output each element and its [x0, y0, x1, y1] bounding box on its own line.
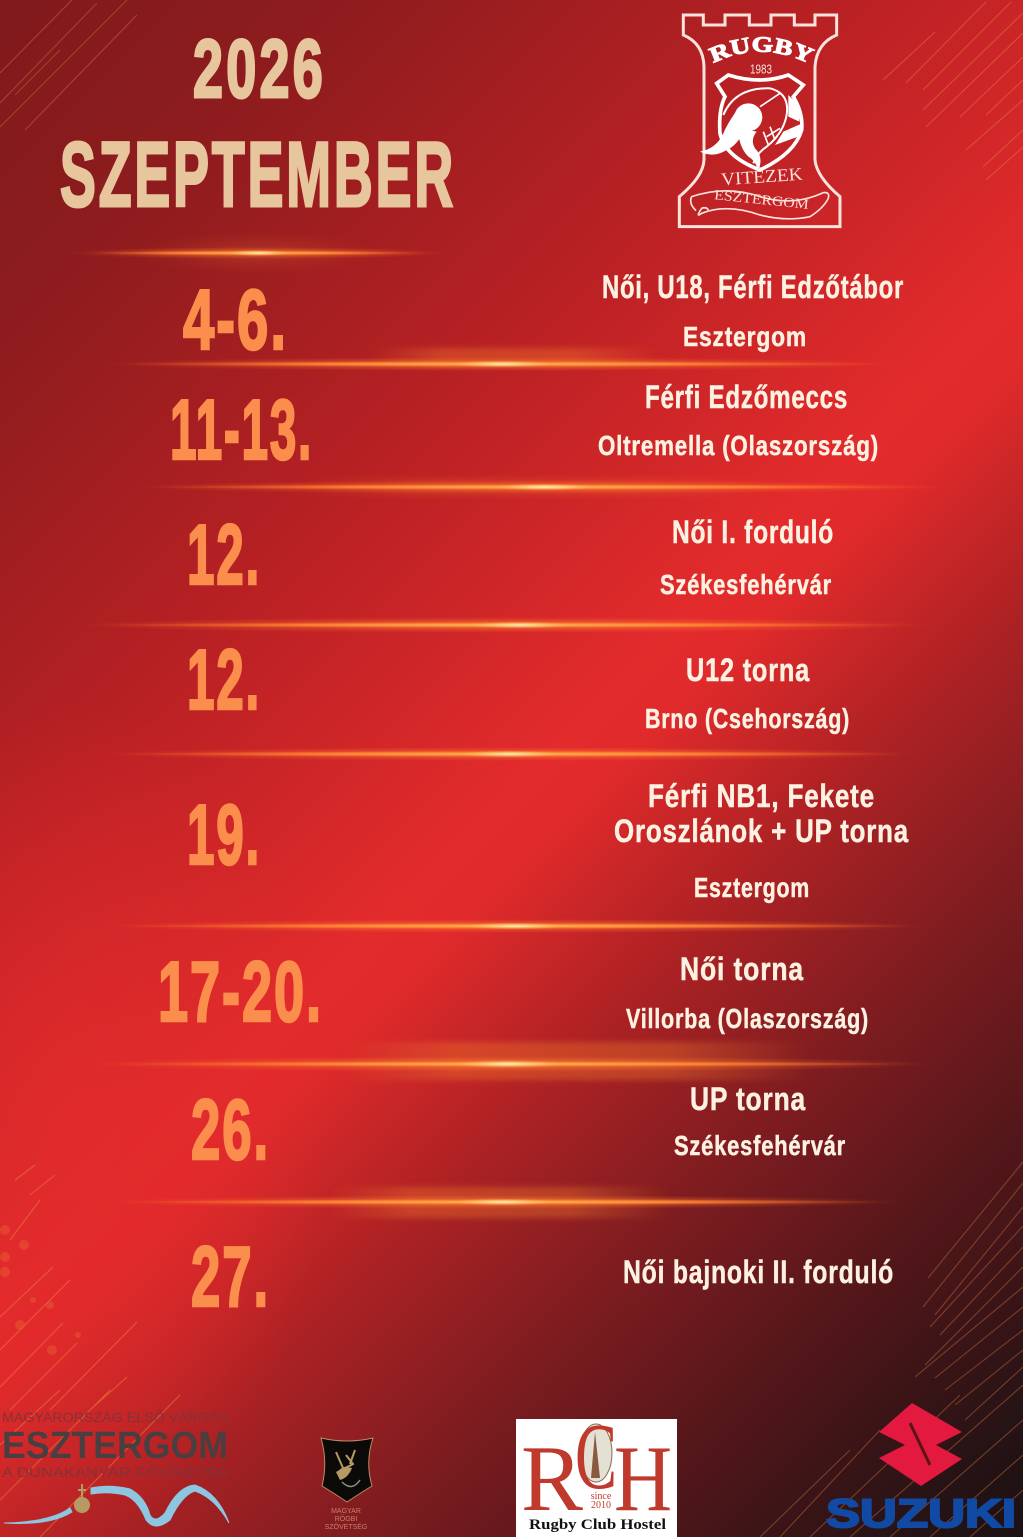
- date: 17-20.: 17-20.: [158, 945, 323, 1040]
- logo: Magyar Rögbi Szövetség: SZÖVETSÉG: [325, 1522, 367, 1531]
- event: UP torna: UP torna: [690, 1081, 806, 1117]
- event: U12 torna: Brno (Csehország): [645, 703, 850, 734]
- date: 26.: 26.: [191, 1083, 270, 1178]
- date: 12.: 12.: [187, 633, 261, 728]
- event: U12 torna: U12 torna: [686, 652, 810, 688]
- date: 27.: 27.: [191, 1230, 270, 1325]
- event: Férfi NB1, Fekete Oroszlánok + UP torna: [614, 778, 909, 903]
- event: UP torna: Székesfehérvár: [674, 1130, 846, 1161]
- event: Női, U18, Férfi Edzőtábor: Női, U18, Férfi Edzőtábor: [602, 269, 904, 305]
- event: Női, U18, Férfi Edzőtábor: Esztergom: [683, 321, 807, 352]
- logo: Esztergom city: [2, 1409, 229, 1526]
- logo: Rugby Vitézek Esztergom: VITÉZEK: [720, 163, 803, 189]
- event: Női I. forduló: Székesfehérvár: [660, 569, 832, 600]
- logo: Rugby Vitézek Esztergom: RUGBY: [708, 36, 816, 64]
- logo: Rugby Club Hostel: [516, 1405, 677, 1537]
- logo: Esztergom city: ESZTERGOM: [2, 1425, 228, 1467]
- event: Férfi Edzőmeccs: Férfi Edzőmeccs: [645, 379, 848, 415]
- date: 19.: 19.: [187, 788, 261, 883]
- month heading: SZEPTEMBER: [60, 124, 456, 226]
- logo: Rugby Vitézek Esztergom: 1983: [750, 61, 772, 76]
- event: Női bajnoki II. forduló: Női bajnoki II. forduló: [623, 1254, 894, 1290]
- logo: Rugby Vitézek Esztergom: [678, 14, 842, 228]
- logo: Magyar Rögbi Szövetség: [321, 1438, 373, 1531]
- date: 11-13.: 11-13.: [170, 383, 313, 478]
- logo: Rugby Club Hostel: Rugby Club Hostel: [529, 1517, 666, 1533]
- logo: Esztergom city: MAGYARORSZÁG ELSŐ VÁROSA: [2, 1409, 229, 1425]
- logo: Magyar Rögbi Szövetség: RÖGBI: [335, 1515, 357, 1523]
- streak texture: bottom right: [760, 1162, 1023, 1537]
- event: Férfi NB1, Fekete Oroszlánok + UP torna: Oroszlánok + UP torna: [614, 813, 909, 849]
- logo: Rugby Club Hostel: 2010: [591, 1500, 611, 1511]
- divider glows: [68, 231, 955, 1218]
- logo: Rugby Club Hostel: C: [575, 1405, 617, 1509]
- streak texture: top left: [0, 0, 137, 130]
- streak texture: top right: [883, 2, 1023, 180]
- event: Férfi NB1, Fekete Oroszlánok + UP torna: Férfi NB1, Fekete: [648, 778, 875, 814]
- streak texture: bottom left: [0, 1165, 180, 1537]
- logo: Rugby Club Hostel: H: [614, 1427, 672, 1531]
- event: Férfi NB1, Fekete Oroszlánok + UP torna: Esztergom: [694, 872, 810, 903]
- event: Női I. forduló: Női I. forduló: [672, 514, 834, 550]
- event: Női torna: Női torna: [680, 951, 804, 987]
- logo: Magyar Rögbi Szövetség: MAGYAR: [331, 1508, 361, 1515]
- date: 12.: 12.: [187, 508, 261, 603]
- logo: Rugby Vitézek Esztergom: ESZTERGOM: [713, 188, 810, 213]
- logo: Esztergom city: A DUNAKANYAR FŐVÁROSA: [2, 1464, 229, 1480]
- year heading: 2026: [193, 22, 326, 115]
- event: Férfi Edzőmeccs: [598, 379, 879, 461]
- event: Női torna: [626, 951, 869, 1034]
- logo: Suzuki: [826, 1403, 1016, 1536]
- event: UP torna: [674, 1081, 846, 1161]
- logo: Rugby Club Hostel: since: [591, 1491, 612, 1502]
- event: U12 torna: [645, 652, 850, 734]
- logo: Rugby Club Hostel: R: [521, 1427, 583, 1531]
- logo: Suzuki: SUZUKI: [826, 1492, 1016, 1536]
- event: Női, U18, Férfi Edzőtábor: [602, 269, 904, 352]
- event: Női I. forduló: [660, 514, 834, 600]
- event: Női torna: Villorba (Olaszország): [626, 1003, 869, 1034]
- date: 4-6.: 4-6.: [183, 273, 288, 368]
- event: Férfi Edzőmeccs: Oltremella (Olaszország): [598, 430, 879, 461]
